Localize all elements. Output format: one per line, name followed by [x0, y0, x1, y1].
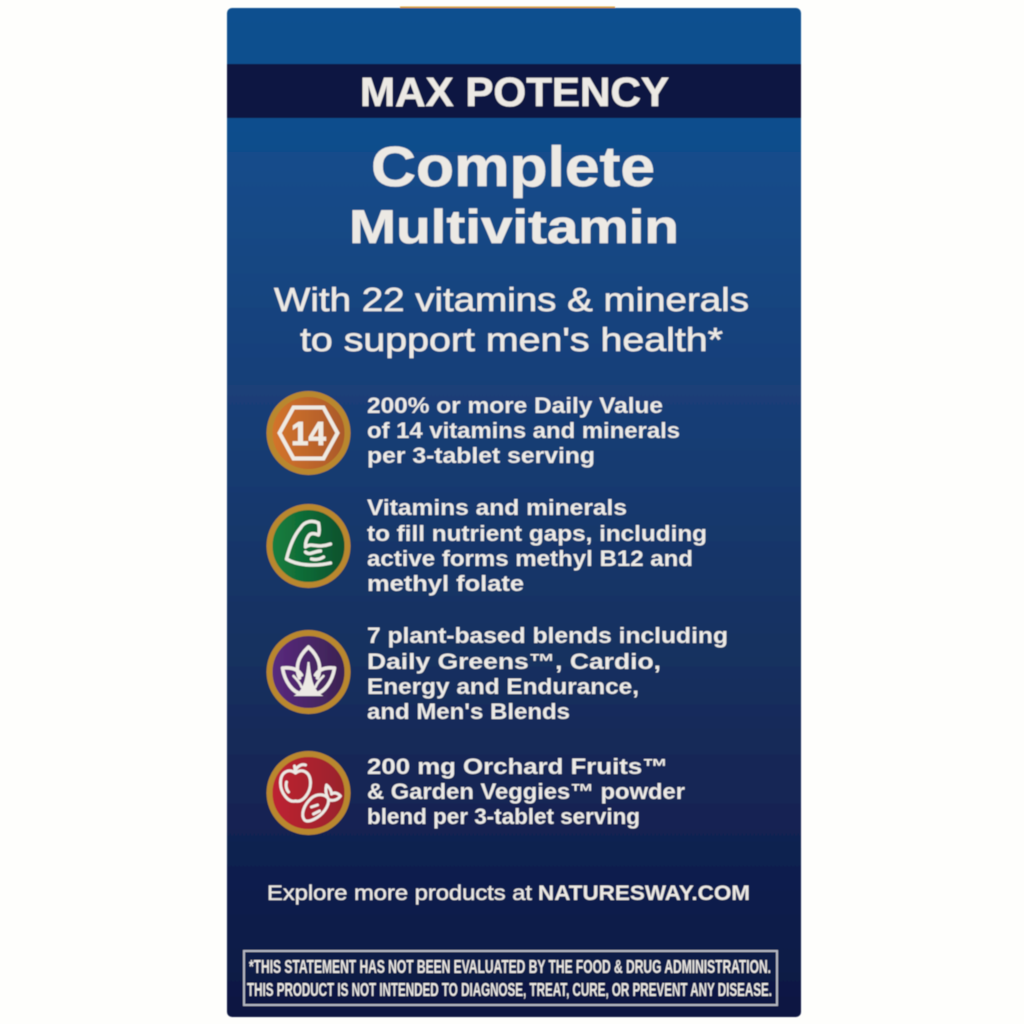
disclaimer box: *THIS STATEMENT HAS NOT BEEN EVALUATED BY THE FOOD & DRUG ADMINISTRATION. — [249, 957, 771, 977]
text: plant blends: Daily Greens™, Cardio, — [367, 649, 661, 674]
text: fruits and veggies: 200 mg Orchard Fruits™ — [367, 754, 668, 779]
website line — [267, 882, 750, 905]
icon: 14 hexagon — [270, 394, 348, 472]
text: daily value: per 3-tablet serving — [367, 443, 595, 468]
text: nutrient gaps: active forms methyl B12 and — [367, 546, 693, 571]
title — [349, 135, 679, 253]
panel: product box side — [227, 6, 801, 1017]
icon: flexed arm — [270, 507, 348, 585]
banner: max potency: MAX POTENCY — [360, 69, 669, 115]
text: plant blends: 7 plant-based blends including — [367, 623, 728, 648]
subtitle — [274, 281, 749, 358]
website line: NATURESWAY.COM — [538, 882, 750, 905]
website line: Explore more products at — [267, 882, 532, 905]
title: Multivitamin — [349, 200, 679, 253]
text: nutrient gaps: to fill nutrient gaps, including — [367, 521, 707, 546]
text: daily value — [367, 393, 680, 468]
subtitle: With 22 vitamins & minerals — [274, 281, 749, 318]
text: daily value: 200% or more Daily Value — [367, 393, 663, 418]
text: fruits and veggies: & Garden Veggies™ powder — [367, 779, 685, 804]
text: nutrient gaps: methyl folate — [367, 571, 524, 596]
icon: 14 hexagon: 14 — [291, 415, 327, 452]
icon: apple and carrot — [270, 754, 348, 832]
title: Complete — [371, 135, 655, 199]
subtitle: to support men's health* — [300, 321, 723, 358]
text: plant blends: Energy and Endurance, — [367, 674, 639, 699]
disclaimer box — [244, 951, 777, 1005]
text: fruits and veggies — [367, 754, 685, 829]
text: fruits and veggies: blend per 3-tablet serving — [367, 804, 640, 829]
text: plant blends: and Men's Blends — [367, 699, 570, 724]
text: daily value: of 14 vitamins and minerals — [367, 418, 680, 443]
banner: max potency — [227, 64, 801, 118]
text: nutrient gaps: Vitamins and minerals — [367, 495, 627, 520]
text: plant blends — [367, 623, 728, 724]
text: nutrient gaps — [367, 495, 707, 596]
icon: plant leaves — [270, 633, 348, 711]
